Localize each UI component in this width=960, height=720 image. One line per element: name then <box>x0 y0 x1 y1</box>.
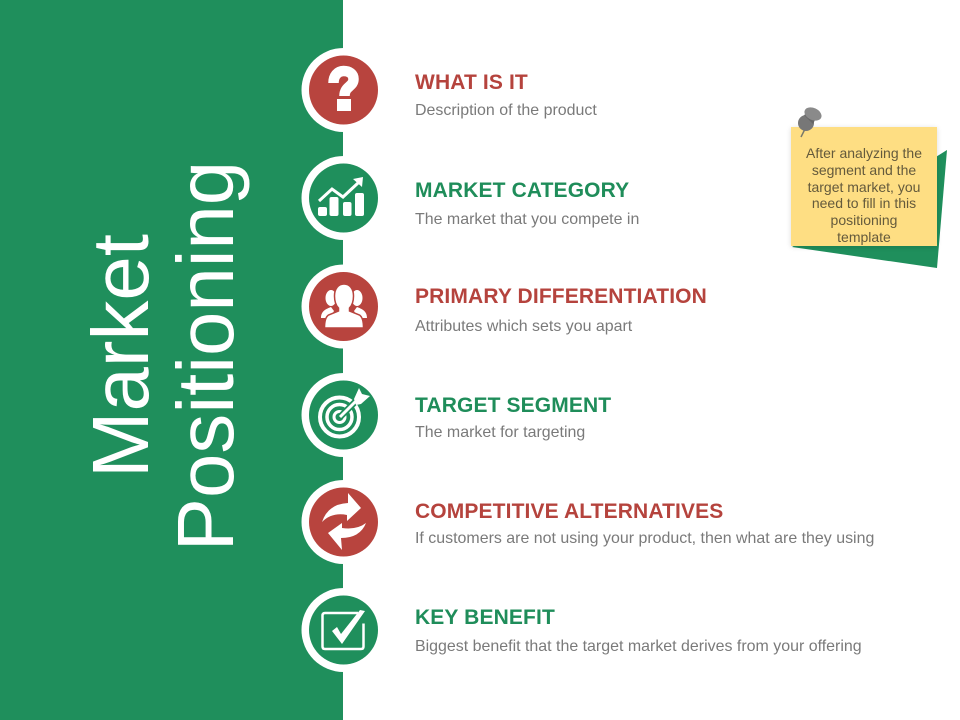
text: Market <box>76 234 165 478</box>
heading: what is it: WHAT IS IT <box>415 71 528 94</box>
text: target segment description: The market for targeting <box>415 424 585 441</box>
icon: growth chart <box>302 156 386 240</box>
icon: target with dart <box>302 373 386 457</box>
panel: green sidebar <box>0 0 343 720</box>
heading: key benefit: KEY BENEFIT <box>415 606 555 629</box>
text: key benefit description: Biggest benefit that the target market derives from your offering <box>415 638 862 655</box>
callout: sticky note <box>791 127 937 246</box>
title: Market Positioning <box>76 161 250 551</box>
icon: people <box>302 264 386 348</box>
text: differentiation description: Attributes which sets you apart <box>415 318 632 335</box>
heading: target segment: TARGET SEGMENT <box>415 394 611 417</box>
icon: checkbox <box>302 588 386 672</box>
text: market category description: The market that you compete in <box>415 211 639 228</box>
sticky note backing <box>792 150 947 268</box>
text: alternatives description: If customers are not using your product, then what are they using <box>415 530 874 547</box>
icon: question mark <box>302 48 386 132</box>
heading: market category: MARKET CATEGORY <box>415 179 629 202</box>
icon: push pin <box>798 107 822 138</box>
text: Positioning <box>161 161 250 551</box>
text: what is it description: Description of the product <box>415 102 597 119</box>
heading: primary differentiation: PRIMARY DIFFERENTIATION <box>415 285 707 308</box>
icon: refresh arrows <box>302 480 386 564</box>
callout: sticky note: After analyzing the segment and the target market, you need to fill in this positioning template <box>806 145 922 245</box>
heading: competitive alternatives: COMPETITIVE ALTERNATIVES <box>415 500 723 523</box>
